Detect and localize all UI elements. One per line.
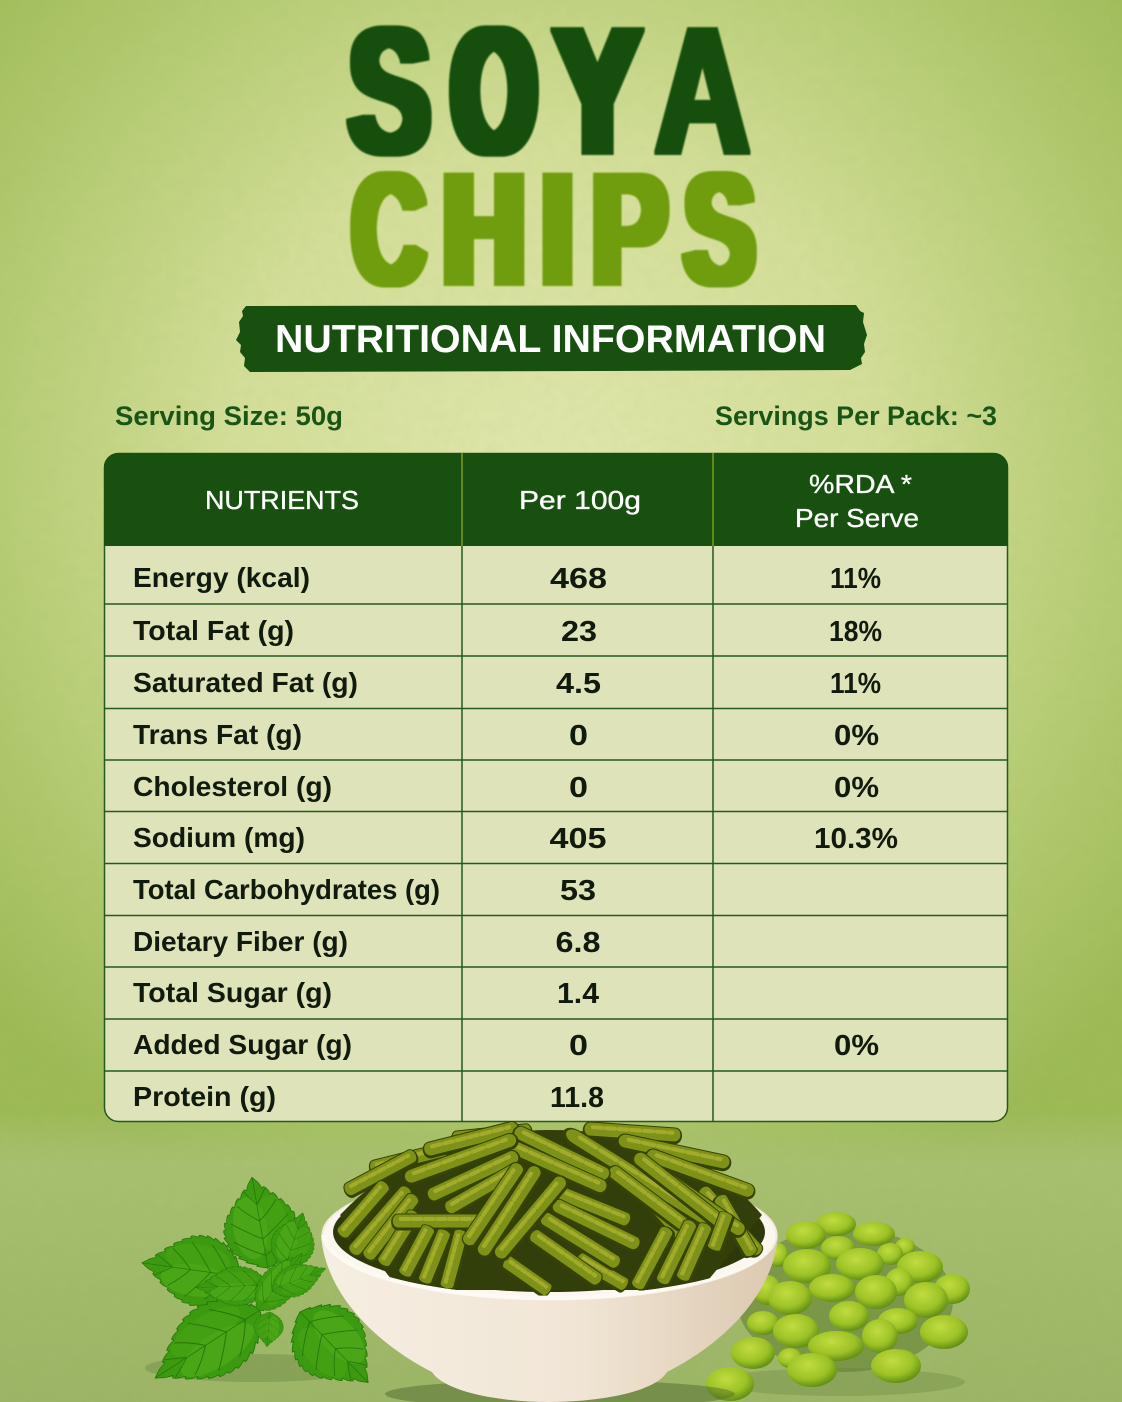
row: cholesterol xyxy=(133,771,879,804)
row: total sugar: 1.4 xyxy=(557,978,599,1010)
row: total fat: 18% xyxy=(829,616,882,648)
row: saturated fat: Saturated Fat (g) xyxy=(133,667,358,698)
row: sodium: 405 xyxy=(550,823,606,855)
row: total fat: Total Fat (g) xyxy=(133,615,294,646)
row: protein xyxy=(133,1081,604,1114)
mint leaves xyxy=(135,1171,395,1402)
bowl shadow xyxy=(385,1380,735,1402)
row: dietary fiber: 6.8 xyxy=(556,927,600,959)
title line: CHIPS: H xyxy=(443,140,525,318)
row: energy: 11% xyxy=(830,563,881,595)
table header: %RDA * xyxy=(809,469,912,499)
row: total sugar: Total Sugar (g) xyxy=(133,977,332,1008)
row: added sugar: Added Sugar (g) xyxy=(133,1029,352,1060)
bowl front rim xyxy=(322,1235,777,1300)
table body xyxy=(104,454,1008,1122)
table header xyxy=(104,453,1008,546)
nutrition table xyxy=(104,453,1008,1122)
row: cholesterol: 0 xyxy=(569,772,588,804)
servings per pack: Servings Per Pack: ~3 xyxy=(715,401,997,431)
title line: CHIPS: P xyxy=(592,140,668,318)
title line: CHIPS: I xyxy=(542,140,573,318)
row: total fat xyxy=(133,615,882,648)
banner: nutritional information: NUTRITIONAL INFORMATION xyxy=(275,318,826,361)
row: dietary fiber xyxy=(133,926,600,959)
row: saturated fat: 4.5 xyxy=(556,668,601,700)
row: cholesterol: Cholesterol (g) xyxy=(133,771,332,802)
title line: CHIPS xyxy=(352,140,755,318)
row: dietary fiber: Dietary Fiber (g) xyxy=(133,926,348,957)
row: total sugar xyxy=(133,977,599,1010)
row: energy: Energy (kcal) xyxy=(133,562,310,593)
row: sodium: Sodium (mg) xyxy=(133,822,305,853)
row: sodium: 10.3% xyxy=(814,823,898,855)
serving size: Serving Size: 50g xyxy=(115,401,343,431)
banner: nutritional information xyxy=(236,305,867,372)
row: protein: 11.8 xyxy=(550,1082,604,1114)
row: added sugar xyxy=(133,1029,879,1062)
title line: SOYA xyxy=(348,0,750,192)
title line: CHIPS: C xyxy=(352,140,425,318)
title line: CHIPS: S xyxy=(684,140,755,318)
table header: NUTRIENTS xyxy=(205,485,359,515)
row: total fat: 23 xyxy=(561,616,597,648)
row: energy: 468 xyxy=(550,563,607,595)
table header: Per 100g xyxy=(519,485,641,515)
peas xyxy=(706,1212,970,1401)
bowl of soya chips xyxy=(321,1127,778,1402)
row: protein: Protein (g) xyxy=(133,1081,276,1112)
row: trans fat xyxy=(133,719,879,752)
chips xyxy=(333,1127,765,1292)
row: trans fat: 0% xyxy=(834,720,879,752)
table header: Per Serve xyxy=(795,503,919,533)
row: added sugar: 0 xyxy=(569,1030,588,1062)
row: energy xyxy=(133,562,881,595)
row: added sugar: 0% xyxy=(834,1030,879,1062)
row: saturated fat xyxy=(133,667,881,700)
bowl body xyxy=(321,1235,778,1402)
row: trans fat: 0 xyxy=(569,720,588,752)
row: sodium xyxy=(133,822,898,855)
row: total carbohydrates: Total Carbohydrates (g) xyxy=(133,874,440,905)
row: total carbohydrates: 53 xyxy=(560,875,596,907)
row: saturated fat: 11% xyxy=(830,668,881,700)
title xyxy=(348,0,755,318)
row: cholesterol: 0% xyxy=(834,772,879,804)
bowl rim xyxy=(322,1170,776,1300)
row: total carbohydrates xyxy=(133,874,596,907)
row: trans fat: Trans Fat (g) xyxy=(133,719,302,750)
